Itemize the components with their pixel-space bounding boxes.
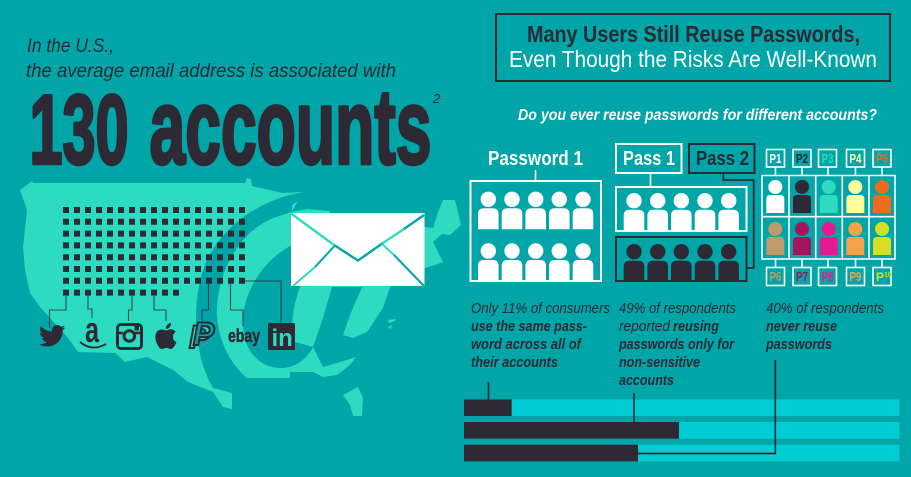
intro text xyxy=(26,36,396,82)
panel: ten passwords: P9 xyxy=(850,269,862,284)
map of the USA with at-sign motif xyxy=(20,178,461,416)
text: 40 percent: passwords xyxy=(765,336,832,353)
panel: two passwords: Pass 1 xyxy=(623,148,675,170)
envelope icon xyxy=(291,213,424,286)
text: 11 percent xyxy=(471,300,610,371)
text: 49 percent: passwords only for xyxy=(618,336,735,353)
icon: twitter xyxy=(39,325,65,346)
text: 49 percent: accounts xyxy=(619,372,674,389)
grid of 130 account squares xyxy=(63,207,245,296)
icon: linkedin: in xyxy=(272,325,293,352)
title box xyxy=(496,14,890,81)
panel: ten passwords: P5 xyxy=(876,151,888,166)
text: 49 percent xyxy=(618,300,736,389)
text: 11 percent: their accounts xyxy=(471,354,558,371)
at-sign: arc above envelope xyxy=(291,209,330,215)
text: 11 percent: word across all of xyxy=(471,336,583,353)
panel: ten passwords: P4 xyxy=(850,151,862,166)
headline: 130 accounts: 2 xyxy=(432,91,441,106)
at-sign: outer ring xyxy=(196,192,307,393)
panel: ten passwords: P7 xyxy=(796,269,808,284)
panel: ten passwords: 10 xyxy=(884,272,892,279)
text: 49 percent: non-sensitive xyxy=(619,354,700,371)
title box: Many Users Still Reuse Passwords, xyxy=(527,21,860,47)
headline: 130 accounts: accounts xyxy=(150,66,432,186)
panel: ten passwords: P xyxy=(876,270,884,284)
title box: Even Though the Risks Are Well-Known xyxy=(509,46,877,72)
bar chart xyxy=(464,360,900,461)
connector lines from squares to logos xyxy=(50,281,281,328)
text: 49 percent: reported xyxy=(619,318,671,335)
text: 11 percent: use the same pass- xyxy=(471,318,587,335)
icon: ebay: ebay xyxy=(228,326,260,346)
text: 11 percent: Only 11% of consumers xyxy=(471,300,610,317)
intro text: the average email address is associated with xyxy=(26,61,396,82)
panel: two passwords xyxy=(616,144,754,282)
icon: paypal: P xyxy=(193,316,215,352)
panel: one password: Password 1 xyxy=(488,148,583,170)
text: 40 percent xyxy=(765,300,884,353)
Florida xyxy=(343,387,363,416)
text: 40 percent: never reuse xyxy=(766,318,837,335)
panel: ten passwords xyxy=(762,150,895,286)
icon: paypal: P xyxy=(189,319,211,355)
text: 40 percent: 40% of respondents xyxy=(766,300,884,317)
icon: apple xyxy=(155,323,176,349)
text: 49 percent: 49% of respondents xyxy=(619,300,736,317)
text: 49 percent: reusing xyxy=(673,318,719,335)
panel: ten passwords: P3 xyxy=(822,151,834,166)
panel: ten passwords: P2 xyxy=(796,151,808,166)
headline: 130 accounts xyxy=(30,66,441,186)
panel: two passwords: Pass 2 xyxy=(696,148,749,170)
icon: instagram xyxy=(117,324,142,348)
panel: ten passwords: P1 xyxy=(770,151,782,166)
panel: one password xyxy=(470,148,601,281)
at-sign: stray specks xyxy=(388,319,396,329)
headline: 130 accounts: 130 xyxy=(30,74,128,184)
intro text: In the U.S., xyxy=(27,36,114,57)
panel: ten passwords: P6 xyxy=(770,269,782,284)
panel: ten passwords: P8 xyxy=(822,269,834,284)
icon: amazon: a xyxy=(85,309,100,350)
